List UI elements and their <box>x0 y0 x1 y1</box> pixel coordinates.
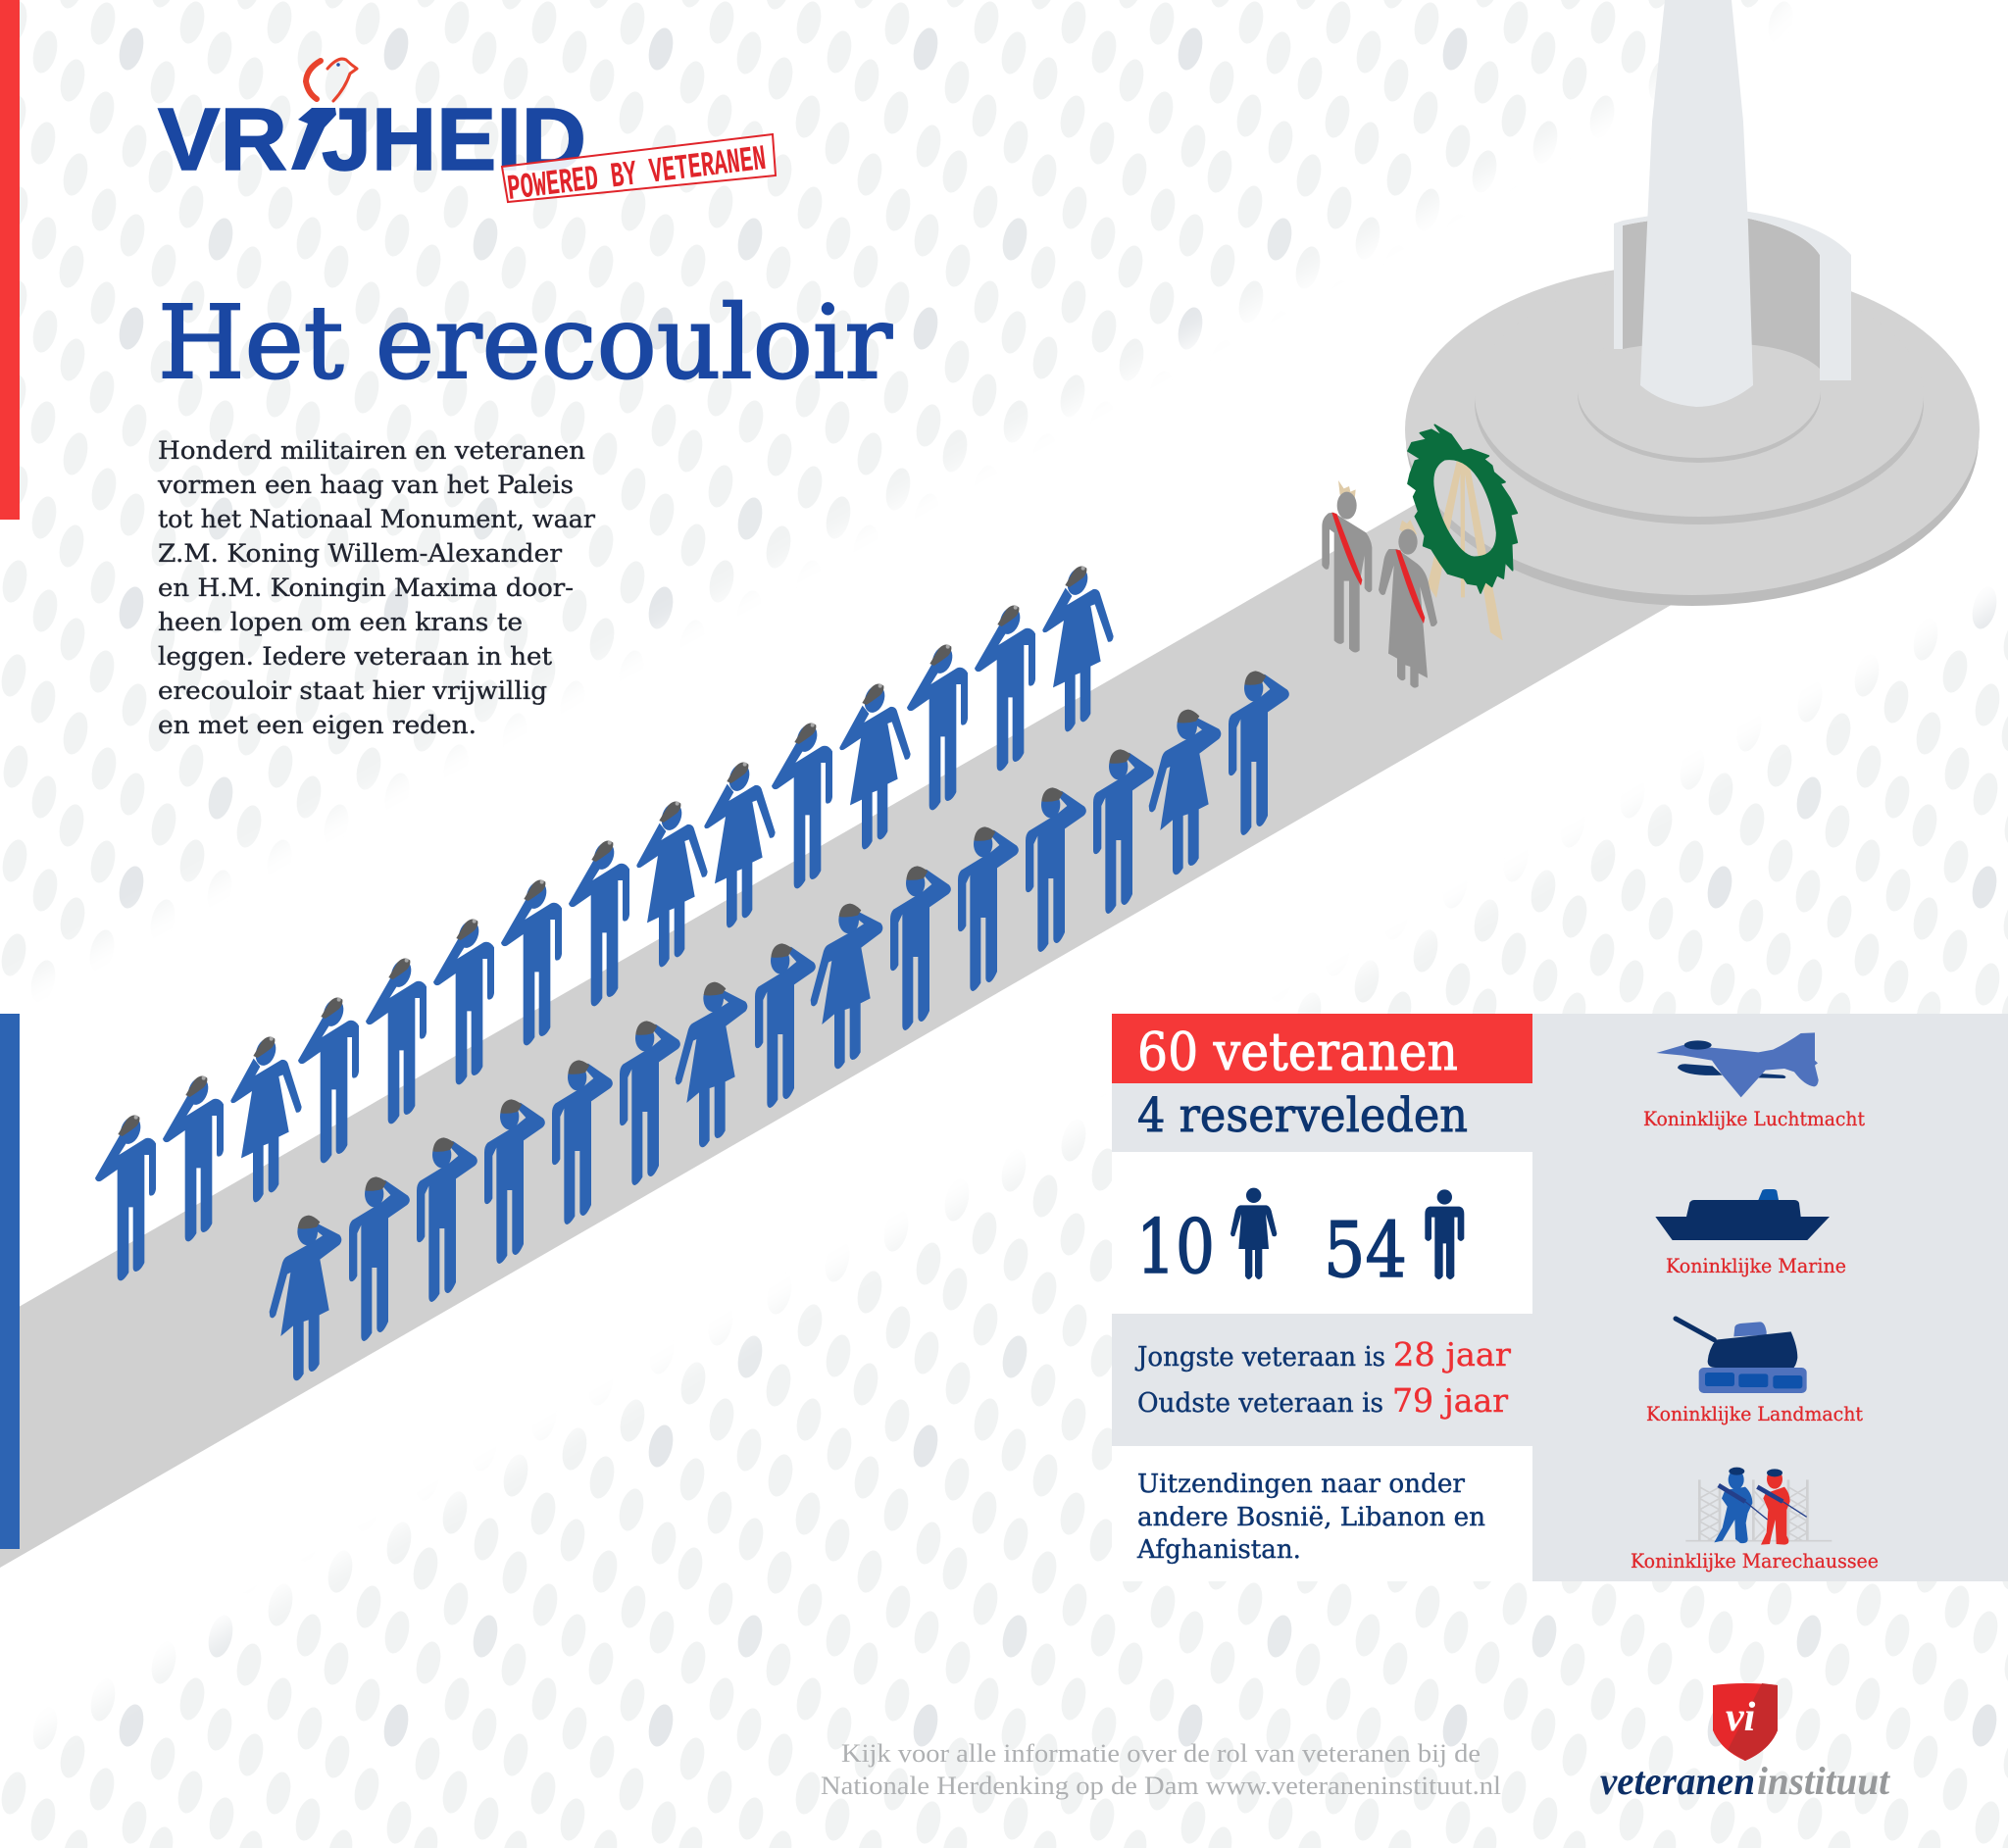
grey road to monument <box>0 473 1765 1568</box>
footer text <box>821 1739 1501 1800</box>
deployments text: Afghanistan. <box>1136 1535 1301 1565</box>
icon: shield <box>1713 1683 1778 1761</box>
veteran <box>433 918 494 1084</box>
veteran <box>636 800 708 967</box>
veteran <box>704 761 776 927</box>
heading: 60 veteranen: 60 veteranen <box>1137 1023 1458 1082</box>
stat: 54 men: 54 <box>1324 1207 1407 1295</box>
veteran <box>890 866 951 1030</box>
veteran <box>163 1074 224 1241</box>
veteran <box>417 1137 477 1302</box>
veteran <box>676 982 747 1147</box>
stat: 54 men <box>1324 1189 1464 1295</box>
ages block: 79 jaar <box>1392 1381 1508 1420</box>
icon: marechaussee guards <box>1685 1468 1832 1545</box>
intro text block <box>157 436 595 739</box>
deployments text <box>1136 1470 1485 1565</box>
logo: veteraneninstituut <box>1600 1683 1891 1803</box>
top row of saluting veterans <box>95 565 1114 1280</box>
veteran <box>95 1114 156 1280</box>
stat: 10 women <box>1136 1188 1277 1290</box>
veteran <box>366 957 427 1124</box>
veteran <box>501 878 562 1045</box>
stamp: powered by veteranen: POWERED BY VETERANEN <box>505 139 768 210</box>
intro text block: Z.M. Koning Willem-Alexander <box>158 539 562 568</box>
veteran <box>755 943 816 1108</box>
veteran <box>1149 710 1221 874</box>
intro text block: en H.M. Koningin Maxima door- <box>158 574 574 602</box>
footer text: Kijk voor alle informatie over de rol van veteranen bij de <box>841 1739 1481 1768</box>
veteran <box>1093 749 1154 914</box>
wordmark <box>158 91 586 189</box>
bottom row of saluting veterans <box>270 671 1289 1380</box>
monument <box>1405 0 1980 606</box>
logo: Vrijheid <box>158 59 586 189</box>
intro text block: heen lopen om een krans te <box>158 608 523 636</box>
panel: statistics <box>1112 1014 1532 1581</box>
label: Koninklijke Landmacht <box>1646 1402 1863 1425</box>
intro text block: tot het Nationaal Monument, waar <box>158 505 595 533</box>
veteran <box>620 1021 680 1185</box>
panel background <box>1532 1014 2008 1581</box>
label: Koninklijke Marechaussee <box>1631 1549 1879 1573</box>
easel <box>1428 454 1503 640</box>
intro text block: en met een eigen reden. <box>158 711 477 739</box>
veteran <box>552 1060 613 1224</box>
intro text block: Honderd militairen en veteranen <box>158 436 585 465</box>
deployments text: andere Bosnië, Libanon en <box>1137 1503 1485 1532</box>
king <box>1322 480 1372 652</box>
heading: 4 reserveleden: 4 reserveleden <box>1137 1088 1468 1143</box>
intro text block: leggen. Iedere veteraan in het <box>158 642 552 671</box>
title: Het erecouloir <box>158 284 893 402</box>
wordmark: JHEID <box>322 91 586 189</box>
ages block <box>1112 1314 1532 1446</box>
stat: 10 women: 10 <box>1136 1203 1215 1290</box>
veteran <box>811 904 882 1069</box>
ages block: 28 jaar <box>1393 1335 1511 1374</box>
heading: 4 reserveleden <box>1112 1083 1532 1152</box>
ages block: Oudste veteraan is <box>1137 1388 1383 1419</box>
wordmark: instituut <box>1757 1759 1891 1803</box>
obelisk <box>1640 0 1753 407</box>
intro text block: vormen een haag van het Paleis <box>157 471 574 499</box>
icon: dove <box>306 59 357 101</box>
white panel background <box>1112 1014 1532 1581</box>
deployments text: Uitzendingen naar onder <box>1137 1470 1466 1499</box>
footer text: Nationale Herdenking op de Dam www.veteraneninstituut.nl <box>821 1772 1501 1800</box>
veteran <box>484 1099 545 1264</box>
panel: armed forces <box>1532 1014 2008 1581</box>
veteran <box>1042 565 1114 731</box>
label: Koninklijke Marine <box>1666 1254 1846 1277</box>
queen <box>1379 520 1437 688</box>
monument curved wall <box>1614 211 1851 380</box>
veteran <box>1229 671 1289 835</box>
wordmark: VR <box>158 91 287 189</box>
wordmark <box>1600 1759 1891 1803</box>
wordmark: veteranen <box>1600 1759 1755 1803</box>
veteran <box>975 604 1035 771</box>
monument base platform <box>1405 264 1980 606</box>
veteran <box>1026 787 1086 952</box>
ages block: Jongste veteraan is <box>1134 1342 1385 1373</box>
veteran <box>839 682 911 849</box>
icon: shield: vi <box>1726 1695 1756 1740</box>
veteran <box>569 839 629 1006</box>
red side bar <box>0 0 20 520</box>
veteran <box>349 1176 410 1341</box>
blue side bar <box>0 1014 20 1549</box>
wreath <box>1408 425 1517 593</box>
veteran <box>772 722 832 888</box>
icon: navy ship <box>1655 1189 1830 1240</box>
veteran <box>907 643 968 810</box>
stamp: powered by veteranen <box>502 134 776 210</box>
veteran <box>270 1216 341 1380</box>
veteran <box>958 826 1019 991</box>
veteran <box>298 996 359 1163</box>
icon: fighter jet <box>1656 1032 1819 1097</box>
icon: tank <box>1676 1319 1807 1393</box>
veteran <box>230 1035 302 1202</box>
label: Koninklijke Luchtmacht <box>1643 1107 1865 1130</box>
intro text block: erecouloir staat hier vrijwillig <box>158 676 547 705</box>
